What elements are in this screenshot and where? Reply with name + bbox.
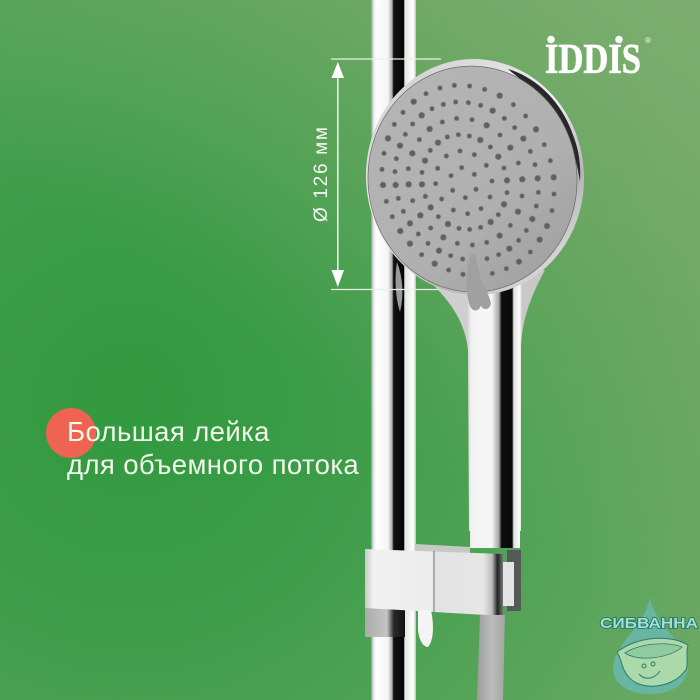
- clip tab: [503, 562, 514, 606]
- headline text: [67, 416, 359, 480]
- headline text: для объемного потока: [67, 449, 359, 480]
- tub face: [639, 662, 660, 678]
- dimension line: top: [331, 58, 441, 60]
- arrowhead top: [332, 62, 344, 78]
- tub rim: [625, 644, 682, 658]
- dimension arrow: [337, 66, 339, 282]
- wall holder: [365, 544, 521, 700]
- holder seam: [433, 551, 435, 612]
- logo dot: [615, 36, 623, 43]
- shower rail: [371, 0, 416, 700]
- hose: [477, 615, 505, 700]
- rear bracket behind head: [396, 262, 402, 312]
- drop: [613, 597, 688, 694]
- holder block: [365, 549, 503, 616]
- dark clip: [507, 550, 521, 611]
- watermark logo: Sibvanna: [600, 597, 698, 694]
- dimension bracket: [331, 59, 441, 290]
- headline text: Большая лейка: [67, 416, 270, 447]
- spray holes: [380, 83, 557, 277]
- arrowhead bottom: [332, 270, 344, 287]
- hand shower: [358, 52, 592, 548]
- dimension label: Ø 126 мм: [311, 127, 332, 222]
- wordmark: СИБВАННА: [600, 615, 698, 632]
- rail collar: [365, 606, 405, 637]
- registered mark: ®: [645, 36, 651, 45]
- dimension line: bottom: [331, 288, 441, 290]
- headline accent circle: [46, 408, 96, 458]
- shell shadow crescent: [508, 69, 580, 182]
- slider lever: [418, 610, 433, 647]
- logo dot: [547, 36, 555, 43]
- brand logo: IDDIS: IDDIS: [545, 37, 641, 83]
- rear plate: [415, 544, 470, 556]
- head shell: [358, 52, 592, 302]
- bathtub: [617, 638, 688, 686]
- handle: [428, 270, 545, 531]
- spray selector peg: [467, 254, 491, 310]
- handle collar: [470, 530, 520, 548]
- spray face: [360, 59, 585, 299]
